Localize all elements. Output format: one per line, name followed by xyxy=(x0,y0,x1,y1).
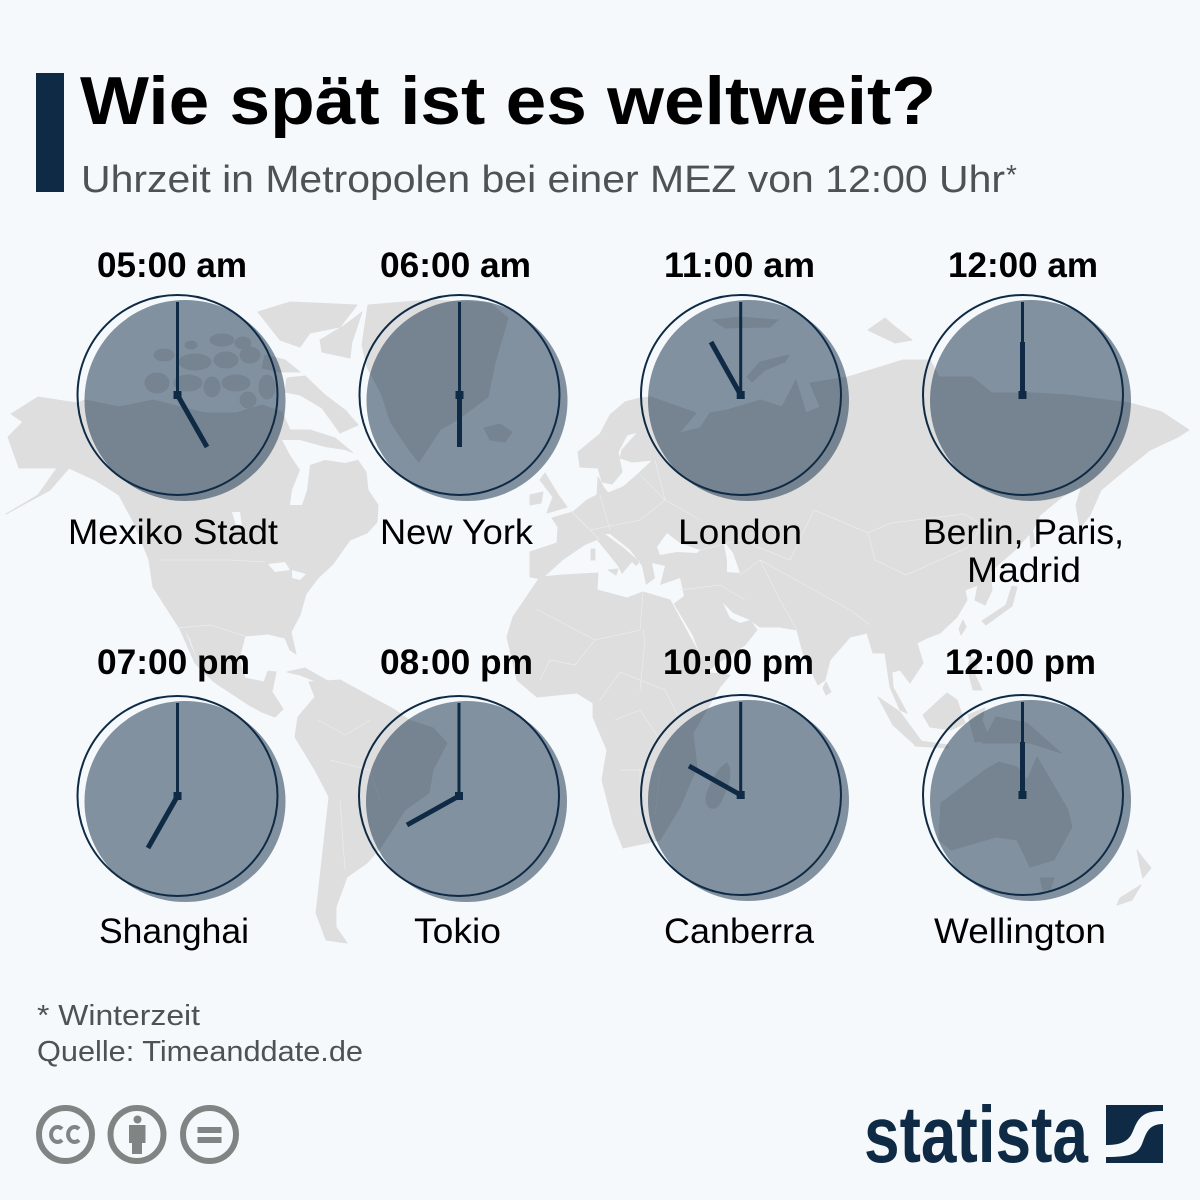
title: Wie spät ist es weltweit? xyxy=(80,63,936,139)
icon: no derivatives xyxy=(183,1108,236,1161)
clock panel: Shanghai xyxy=(78,643,286,951)
clock panel: Berlin, Paris, Madrid: Berlin, Paris, xyxy=(923,513,1124,552)
clock panel: Tokio: 08:00 pm xyxy=(380,643,533,682)
statista logo: statista xyxy=(864,1090,1088,1179)
clock panel: Wellington xyxy=(923,643,1131,951)
clock panel: Mexiko Stadt: Mexiko Stadt xyxy=(68,513,278,552)
clock panel: New York xyxy=(360,246,568,552)
subtitle: * xyxy=(1006,159,1017,190)
footnote and source xyxy=(37,1000,363,1068)
subtitle: Uhrzeit in Metropolen bei einer MEZ von 12:00 Uhr xyxy=(81,159,1005,201)
South America xyxy=(295,680,447,943)
title accent bar xyxy=(36,73,64,192)
clock panel: Wellington: 12:00 pm xyxy=(945,643,1096,682)
clock panel: New York: New York xyxy=(380,513,534,552)
clock panel: Shanghai: Shanghai xyxy=(99,912,249,951)
clock panel: Canberra: 10:00 pm xyxy=(663,643,814,682)
clock panel: Berlin, Paris, Madrid xyxy=(923,246,1131,590)
icon: attribution xyxy=(110,1108,164,1161)
footnote and source: * Winterzeit xyxy=(37,1000,200,1032)
world map background xyxy=(6,300,1189,943)
icon: creative commons xyxy=(39,1108,92,1161)
clock panel: London: London xyxy=(678,513,802,552)
Africa xyxy=(507,573,730,848)
Asia Pacific islands xyxy=(959,620,966,635)
clock panel: Wellington: Wellington xyxy=(934,912,1106,951)
clock panel: London xyxy=(641,246,849,552)
Europe islands xyxy=(540,473,567,513)
footnote and source: Quelle: Timeanddate.de xyxy=(37,1036,363,1068)
clock panel: New York: 06:00 am xyxy=(380,246,531,285)
Eurasia xyxy=(530,360,1189,713)
clock panel: Mexiko Stadt: 05:00 am xyxy=(97,246,247,285)
clock panel: Canberra xyxy=(641,643,849,951)
seas cut out of the land xyxy=(185,440,750,668)
clock panel: Tokio: Tokio xyxy=(414,912,501,951)
clock panel: Shanghai: 07:00 pm xyxy=(97,643,250,682)
clock panel: Berlin, Paris, Madrid: Madrid xyxy=(967,551,1081,590)
clock panel: Canberra: Canberra xyxy=(664,912,815,951)
Australia and New Zealand xyxy=(939,757,1072,867)
clock panel: London: 11:00 am xyxy=(664,246,815,285)
clock panel: Tokio xyxy=(359,643,567,951)
clock panel: Mexiko Stadt xyxy=(68,246,286,552)
clock panel: Berlin, Paris, Madrid: 12:00 am xyxy=(948,246,1098,285)
country borders xyxy=(160,460,983,870)
